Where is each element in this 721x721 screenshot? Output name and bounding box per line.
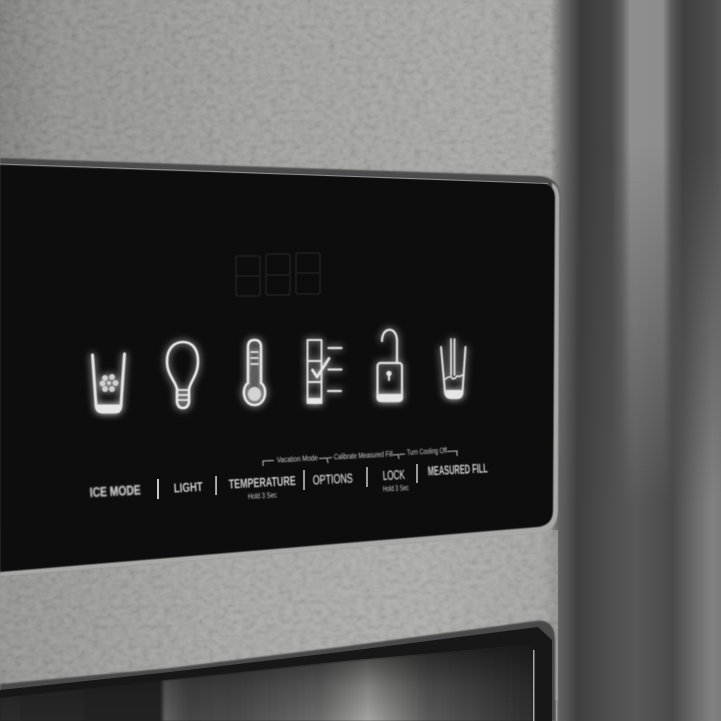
label: measured fill: MEASURED FILL [427, 460, 488, 478]
label: lock: Hold 3 Sec [383, 483, 409, 493]
label: lock: LOCK [382, 467, 405, 483]
secondary function labels with brackets: Turn Cooling Off [407, 446, 448, 457]
label: temperature [228, 473, 296, 501]
label: temperature: Hold 3 Sec [248, 490, 277, 501]
secondary function labels with brackets: Vacation Mode [277, 453, 318, 464]
separator [416, 464, 418, 483]
label: temperature: TEMPERATURE [228, 473, 296, 491]
label: lock [382, 467, 409, 493]
separator [157, 479, 159, 499]
panel: lower stainless trim [0, 530, 558, 700]
panel: right stainless door column [550, 0, 721, 721]
secondary function labels with brackets: Calibrate Measured Fill [334, 449, 393, 461]
separator [215, 476, 217, 495]
icon: ice mode cup [92, 354, 124, 412]
separator [303, 470, 305, 490]
icon: thermometer [244, 340, 265, 405]
panel: ice and water dispenser recess [0, 621, 558, 721]
label: light: LIGHT [173, 479, 203, 495]
secondary function labels with brackets [263, 446, 457, 466]
icon: lock [378, 330, 402, 401]
label: options: OPTIONS [312, 470, 353, 487]
icon: ice cluster [100, 374, 118, 392]
icon: options checklist [308, 340, 342, 403]
separator [366, 467, 368, 487]
panel: black glass control panel [0, 158, 560, 576]
faint unlit display digits [236, 253, 320, 296]
label: ice mode: ICE MODE [89, 482, 141, 500]
icon: measured fill glass [441, 339, 466, 398]
icon: light bulb [167, 342, 198, 408]
